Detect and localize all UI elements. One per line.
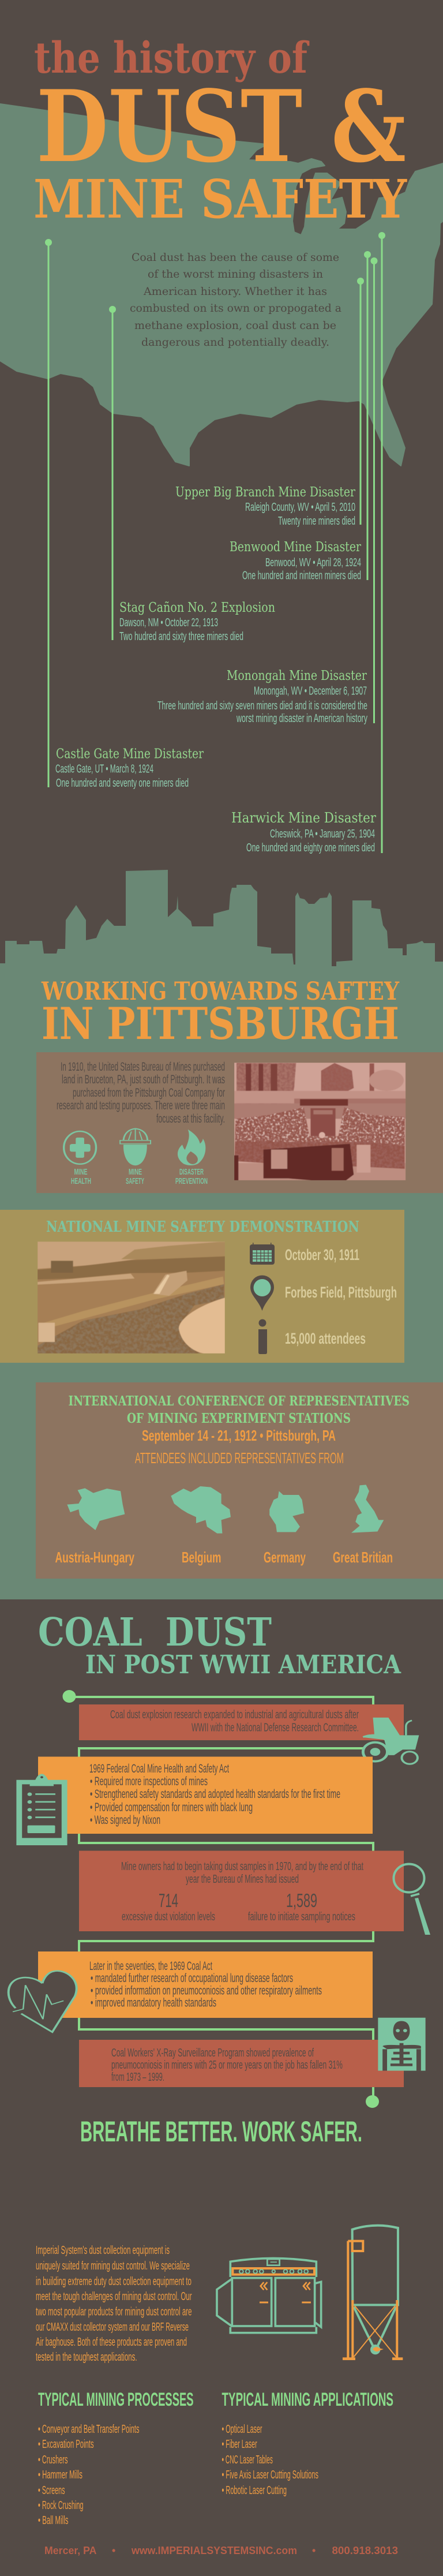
demonstration facts: October 30, 1911 [285,1246,359,1263]
disaster: Benwood: Benwood Mine Disaster [230,540,361,555]
disaster: Upper Big Branch: Upper Big Branch Mine Disaster [175,485,355,500]
list: typical mining processes: • Ball Mills [38,2514,68,2527]
panel: WWII research [79,1704,404,1740]
dark section background [0,1599,443,2576]
Pittsburgh skyline [0,870,443,981]
paragraph: focuses at this facility. [156,1112,225,1126]
disaster: Harwick: Cheswick, PA • January 25, 1904 [270,828,375,840]
company paragraph: two most popular products for mining dust control are [36,2305,192,2318]
company paragraph: tested in the toughest applications. [36,2351,137,2364]
photo: Forbes Field [37,1242,225,1354]
panel: 1969 act: • Provided compensation for miners with black lung [90,1801,253,1814]
list: typical mining processes: • Rock Crushing [38,2499,83,2512]
timeline end dot [366,2095,379,2108]
disaster: Castle Gate: Castle Gate, UT • March 8, 1924 [55,763,153,776]
panel: dust samples [79,1850,404,1931]
list: typical mining processes: • Crushers [38,2454,68,2466]
timeline connector [69,1697,375,2102]
icon labels: DISASTER [179,1167,204,1177]
icon: mine health [64,1131,96,1164]
icon labels: MINE [74,1167,88,1177]
list: typical mining processes: TYPICAL MINING PROCESSES [38,2389,194,2410]
company paragraph: in building extreme duty dust collection equipment to [36,2275,192,2288]
date and place: September 14 - 21, 1912 • Pittsburgh, PA [142,1427,336,1444]
disaster: Upper Big Branch: Raleigh County, WV • April 5, 2010 [245,501,355,514]
company paragraph: our CMAXX dust collector system and our BRF Reverse [36,2321,189,2334]
intro paragraph: American history. Whether it has [143,285,327,298]
heading: OF MINING EXPERIMENT STATIONS [127,1411,351,1426]
demonstration facts: 15,000 attendees [285,1330,366,1347]
panel: x-ray surveillance [79,2040,404,2087]
country labels: Belgium [182,1549,222,1566]
company paragraph: Air baghouse. Both of these products are proven and [36,2336,187,2349]
icon: calendar [250,1243,275,1265]
icon labels [71,1167,208,1186]
list: typical mining applications: • Fiber Laser [222,2438,257,2451]
photo: crowd at the mine demonstration [234,1063,406,1180]
panel: later in the seventies: • mandated further research of occupational lung disease factors [91,1972,293,1985]
disaster: Stag Canon: Two hudred and sixty three miners died [119,630,243,643]
icon labels: PREVENTION [175,1176,208,1186]
icon labels: HEALTH [71,1176,91,1186]
footer contact line [44,2545,398,2556]
heading: NATIONAL MINE SAFETY DEMONSTRATION [46,1218,359,1236]
panel: later in the seventies: • improved mandatory health standards [91,1996,216,2010]
intro paragraph [130,251,341,349]
panel: Bruceton research facility [36,1052,443,1193]
list: typical mining processes: • Conveyor and Belt Transfer Points [38,2423,140,2436]
disaster: Monongah: Monongah, WV • December 6, 1907 [254,685,367,697]
heading: coal dust in post WWII America: IN POST WWII AMERICA [85,1650,401,1680]
intro paragraph: methane explosion, coal dust can be [134,319,336,332]
heading: coal dust in post WWII America: COAL DUST [38,1609,272,1655]
footer contact line: • [112,2545,115,2556]
intro paragraph: of the worst mining disasters in [148,268,323,281]
footer contact line: 800.918.3013 [332,2545,398,2556]
footer contact line: www.IMPERIALSYSTEMSINC.com [131,2545,297,2556]
timeline pins [45,232,385,853]
disaster: Monongah: worst mining disaster in American history [236,712,367,725]
disaster: Monongah: Monongah Mine Disaster [227,668,367,683]
panel: national mine safety demonstration [0,1210,404,1363]
map of the United States [0,104,443,466]
disaster: Benwood: One hundred and ninteen miners died [242,569,361,582]
disaster: Castle Gate: Castle Gate Mine Distaster [56,747,204,762]
intro paragraph: combusted on its own or propogated a [130,302,341,315]
disaster: Castle Gate: One hundred and seventy one miners died [56,777,189,790]
icon: map pin [250,1276,274,1311]
icon: magnifying glass [393,1864,430,1935]
list: typical mining processes: • Screens [38,2484,65,2497]
disaster: Castle Gate [55,747,204,790]
icon: dust collector [217,2258,321,2333]
list: typical mining applications: • Five Axis Laser Cutting Solutions [222,2469,318,2481]
panel: dust samples: excessive dust violation levels [122,1910,215,1923]
intro paragraph: Coal dust has been the cause of some [132,251,339,264]
disaster: Stag Canon: Dawson, NM • October 22, 1913 [119,616,218,629]
country labels: Great Britian [333,1549,393,1566]
company paragraph: meet the tough challenges of mining dust control. Our [36,2290,192,2303]
disaster: Upper Big Branch: Twenty nine miners died [278,515,355,528]
country maps [67,1485,384,1534]
icon: tractor [363,1718,419,1764]
panel: dust samples: year the Bureau of Mines had issued [186,1873,299,1886]
country labels: Austria-Hungary [55,1549,134,1566]
panel: x-ray surveillance: Coal Workers' X-Ray Surveillance Program showed prevalence of [111,2047,314,2059]
company paragraph: Imperial System's dust collection equipment is [36,2244,170,2257]
title [33,33,407,230]
footer contact line: • [312,2545,316,2556]
icon labels: MINE [129,1167,142,1177]
paragraph: land in Bruceton, PA, just south of Pittsburgh. It was [62,1073,225,1086]
green section background [0,970,443,1599]
disaster: Benwood [230,540,361,582]
icon: heart with pulse [9,1971,77,2032]
icon labels: SAFETY [126,1176,144,1186]
panel: x-ray surveillance: from 1973 – 1999. [111,2071,164,2084]
icon: x-ray skeleton [378,2018,426,2071]
icon: baghouse silo [343,2226,403,2360]
disaster: Harwick: Harwick Mine Disaster [231,810,376,826]
panel: 1969 act: • Required more inspections of mines [90,1775,208,1788]
paragraph [57,1060,225,1126]
disaster: Monongah [157,668,367,725]
paragraph: purchased from the Pittsburgh Coal Company for [73,1086,225,1100]
country labels [55,1549,393,1566]
list: typical mining applications [222,2389,393,2497]
disaster: Benwood: Benwood, WV • April 28, 1924 [265,556,361,569]
footer contact line: Mercer, PA [44,2545,97,2556]
panel: international conference [36,1382,443,1579]
paragraph: research and testing purposes. There were three main [57,1099,225,1112]
panel: 1969 act [38,1757,373,1834]
icon: person [258,1319,267,1354]
disaster: Stag Canon [119,600,275,643]
list: typical mining processes [38,2389,194,2527]
company paragraph: uniquely suited for mining dust control. We specialize [36,2260,190,2272]
panel: 1969 act: • Was signed by Nixon [90,1814,160,1827]
panel: 1969 act: 1969 Federal Coal Mine Health and Safety Act [89,1762,229,1775]
list: typical mining applications: • Optical Laser [222,2423,262,2436]
icon: mine safety helmet [120,1128,151,1165]
list: typical mining processes: • Hammer Mills [38,2469,82,2481]
icon: disaster prevention flame [178,1130,205,1165]
title: the history of [34,33,310,83]
timeline start dot [62,1690,76,1703]
list: typical mining applications: • CNC Laser Tables [222,2454,273,2466]
panel: dust samples: failure to initiate sampling notices [248,1910,355,1923]
panel: dust samples: 1,589 [286,1890,317,1911]
list: typical mining applications: • Robotic Laser Cutting [222,2484,287,2497]
paragraph: In 1910, the United States Bureau of Mines purchased [61,1060,225,1074]
disaster: Harwick [231,810,376,854]
demonstration facts [285,1246,397,1347]
disaster: Upper Big Branch [175,485,355,528]
heading: coal dust in post WWII America [38,1609,401,1680]
intro paragraph: dangerous and potentially deadly. [141,336,329,349]
panel: later in the seventies: Later in the seventies, the 1969 Coal Act [89,1960,212,1973]
panel: dust samples: 714 [159,1890,178,1911]
icon: clipboard [16,1774,67,1845]
heading: working towards safety in Pittsburgh [41,977,400,1049]
disaster: Stag Canon: Stag Cañon No. 2 Explosion [119,600,275,615]
heading [68,1393,410,1426]
list: typical mining processes: • Excavation Points [38,2438,94,2451]
country labels: Germany [264,1549,306,1566]
panel: later in the seventies [38,1951,373,2018]
company paragraph [36,2244,192,2364]
